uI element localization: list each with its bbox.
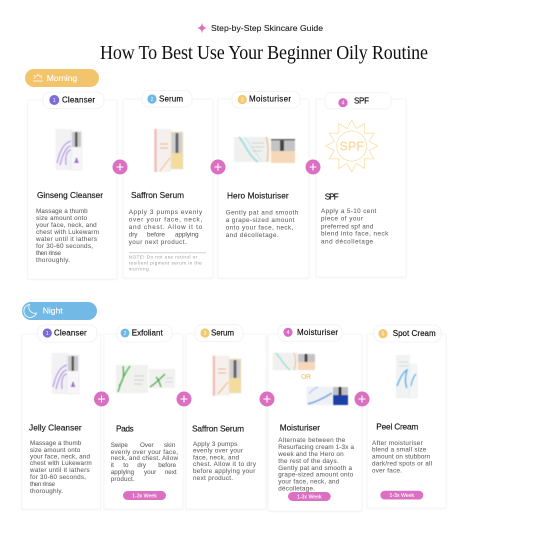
step label: moisturiser: 4 xyxy=(287,330,290,336)
description: for 30-60 seconds, xyxy=(30,474,86,481)
description: Apply a 5-10 cent xyxy=(321,208,377,215)
frequency pill: 1-3x Week xyxy=(132,493,157,499)
step label: serum: Serum xyxy=(211,329,234,338)
step label: spot cream xyxy=(374,325,441,342)
description: evenly over your xyxy=(193,448,243,454)
description xyxy=(226,210,299,239)
step label: spf xyxy=(325,92,391,109)
description: applying xyxy=(111,469,134,476)
panel: morning cleanser xyxy=(28,92,117,279)
frequency pill: 1-3x Week xyxy=(297,494,322,500)
step label: moisturiser xyxy=(278,325,342,341)
icon: spf sun: SPF xyxy=(340,140,364,154)
description: onto your face, neck, xyxy=(226,225,294,232)
plus connector xyxy=(94,392,109,406)
product: saffron serum xyxy=(154,129,183,172)
night badge: Night xyxy=(43,305,63,315)
panel: night serum xyxy=(186,325,266,509)
step label: cleanser xyxy=(43,92,104,108)
panel: night moisturiser xyxy=(268,325,362,511)
heading: Saffron Serum xyxy=(192,423,244,433)
description: your face, neck, and xyxy=(30,454,90,460)
or label: OR xyxy=(301,374,311,381)
description: product. xyxy=(111,476,135,483)
step label: exfoliant: 2 xyxy=(124,331,127,337)
description xyxy=(35,208,99,264)
step label: moisturiser: 3 xyxy=(241,97,244,103)
description: dry xyxy=(129,231,137,238)
step label: exfoliant xyxy=(117,325,172,342)
description: applying xyxy=(175,231,199,238)
description: blend a small size xyxy=(372,446,427,454)
description: dry xyxy=(137,462,147,469)
step label: moisturiser xyxy=(232,92,300,108)
description: and décolletage. xyxy=(226,232,279,239)
product: ginseng cleanser xyxy=(56,129,82,170)
description: before xyxy=(147,231,165,238)
product: saffron serum xyxy=(213,356,241,396)
description: Over xyxy=(140,442,154,449)
step label: cleanser xyxy=(38,325,97,342)
plus connector xyxy=(210,160,226,174)
frequency pill xyxy=(288,492,331,501)
step label: cleanser: Cleanser xyxy=(62,96,95,105)
description: over face. xyxy=(372,468,402,474)
description: face, neck, and xyxy=(193,454,239,462)
description: thoroughly. xyxy=(30,488,63,495)
step label: spf: SPF xyxy=(354,97,369,106)
product: hero moisturiser xyxy=(273,353,315,370)
night badge xyxy=(22,302,97,320)
description: for 30-60 seconds, xyxy=(36,243,93,250)
description: a grape-sized amount xyxy=(226,217,295,224)
description: before applying your xyxy=(193,468,255,475)
note: resilient pigment serum in the xyxy=(129,261,202,266)
step label: cleanser: 1 xyxy=(53,98,56,104)
plus connector xyxy=(260,392,274,406)
step label: serum: 3 xyxy=(204,331,207,337)
plus connector xyxy=(112,160,128,174)
description: your next product. xyxy=(129,239,187,246)
description xyxy=(193,441,257,482)
step label: serum xyxy=(195,325,243,342)
description: then rinse xyxy=(36,250,61,257)
note: NOTE! Do not use retinol or xyxy=(129,254,198,260)
plus connector xyxy=(176,392,192,406)
description: next product. xyxy=(193,475,233,482)
description: and chest. Allow it to xyxy=(129,224,203,231)
description: Swipe xyxy=(111,442,128,449)
plus connector xyxy=(354,392,370,406)
step label: serum xyxy=(142,90,192,107)
description: your face, neck, and xyxy=(278,478,340,486)
description: it xyxy=(111,462,114,469)
description: Gently pat and smooth xyxy=(226,210,299,217)
product: jelly cleanser xyxy=(52,353,79,394)
description: size amount onto xyxy=(36,215,87,222)
description: After moisturiser xyxy=(372,440,423,447)
description: over your face, neck, xyxy=(129,217,202,224)
description: size amount onto xyxy=(30,447,81,454)
description: Resurfacing cream 1-3x a xyxy=(278,444,354,451)
description xyxy=(29,440,92,495)
step label: exfoliant: Exfoliant xyxy=(132,328,163,337)
panel: night exfoliant xyxy=(104,325,183,509)
description xyxy=(277,437,354,492)
heading: Saffron Serum xyxy=(131,190,184,200)
heading: Moisturiser xyxy=(280,423,320,433)
description: Massage a thumb xyxy=(30,440,82,447)
description: preferred spf and xyxy=(321,223,374,230)
panel: morning moisturiser xyxy=(218,92,309,278)
description: to xyxy=(123,462,129,469)
heading: Hero Moisturiser xyxy=(227,190,289,200)
description: your face, neck, and xyxy=(36,222,97,229)
morning badge: Morning xyxy=(47,73,77,83)
product: resurfacing cream xyxy=(307,387,348,405)
description: Apply 3 pumps xyxy=(193,441,237,448)
frequency pill: 1-3x Week xyxy=(389,493,415,499)
panel: night spot cream xyxy=(367,325,446,508)
step label: cleanser: Cleanser xyxy=(54,328,87,337)
icon: pink star xyxy=(197,22,207,34)
icon: sunrise xyxy=(33,74,43,81)
description: chest. Allow it to dry xyxy=(193,461,257,468)
description xyxy=(111,442,178,483)
step label: spot cream: Spot Cream xyxy=(393,329,436,338)
product: pads xyxy=(116,365,175,393)
plus connector xyxy=(306,160,320,174)
heading: Jelly Cleanser xyxy=(29,423,82,433)
heading: Ginseng Cleanser xyxy=(37,190,103,200)
description: water until it lathers xyxy=(29,467,90,474)
eyebrow text: Step-by-Step Skincare Guide xyxy=(211,23,323,33)
description: Apply 3 pumps evenly xyxy=(129,209,203,216)
step label: cleanser: 1 xyxy=(46,331,49,337)
divider xyxy=(129,251,206,254)
step label: serum: 2 xyxy=(151,97,154,103)
panel: morning serum xyxy=(123,90,213,278)
description: amount on stubborn xyxy=(372,454,431,460)
title: How To Best Use Your Beginner Oily Routine xyxy=(100,42,428,64)
description: your xyxy=(144,469,156,476)
panel: morning spf xyxy=(316,92,406,277)
description: décolletage. xyxy=(278,486,315,492)
description: Gently pat and smooth a xyxy=(278,465,352,472)
description: Massage a thumb xyxy=(36,208,88,215)
description: week and the Hero on xyxy=(277,451,344,458)
description: grape-sized amount onto xyxy=(278,472,354,478)
description: thoroughly. xyxy=(36,257,70,264)
description: before xyxy=(158,462,177,469)
description xyxy=(129,209,203,246)
description: evenly over your face, xyxy=(111,449,178,456)
step label: moisturiser: Moisturiser xyxy=(297,328,338,337)
description: and décolletage xyxy=(321,238,373,245)
description: chest with Lukewarm xyxy=(30,460,92,467)
description xyxy=(321,208,389,245)
frequency pill xyxy=(123,491,166,500)
note xyxy=(129,254,202,272)
description: skin xyxy=(164,442,176,449)
note: morning xyxy=(129,267,149,272)
description: the rest of the days. xyxy=(278,458,339,465)
step label: serum: Serum xyxy=(159,95,183,104)
icon: spf sun xyxy=(326,120,378,172)
description: then rinse xyxy=(30,481,55,488)
description: piece of your xyxy=(321,216,363,223)
panel: night cleanser xyxy=(22,325,101,509)
description: neck, and chest. Allow xyxy=(111,455,178,462)
description: Alternate between the xyxy=(278,437,346,444)
product: peel cream xyxy=(396,355,418,398)
heading: SPF xyxy=(325,192,339,202)
step label: spot cream: 5 xyxy=(382,332,385,338)
step label: moisturiser: Moisturiser xyxy=(249,94,291,103)
description: blend into face, neck xyxy=(321,231,389,238)
description: dark/red spots or all xyxy=(372,460,432,468)
description: water until it lathers xyxy=(35,236,97,243)
description xyxy=(372,440,432,474)
step label: spf: 4 xyxy=(342,100,345,106)
heading: Peel Cream xyxy=(376,421,418,431)
icon: moon xyxy=(24,304,36,317)
description: chest with Lukewarm xyxy=(36,229,99,236)
frequency pill xyxy=(380,491,423,500)
header: eyebrow with star xyxy=(197,22,323,34)
heading: Pads xyxy=(116,423,134,433)
description: next xyxy=(165,469,177,476)
product: hero moisturiser xyxy=(234,137,295,163)
morning badge xyxy=(25,69,99,87)
